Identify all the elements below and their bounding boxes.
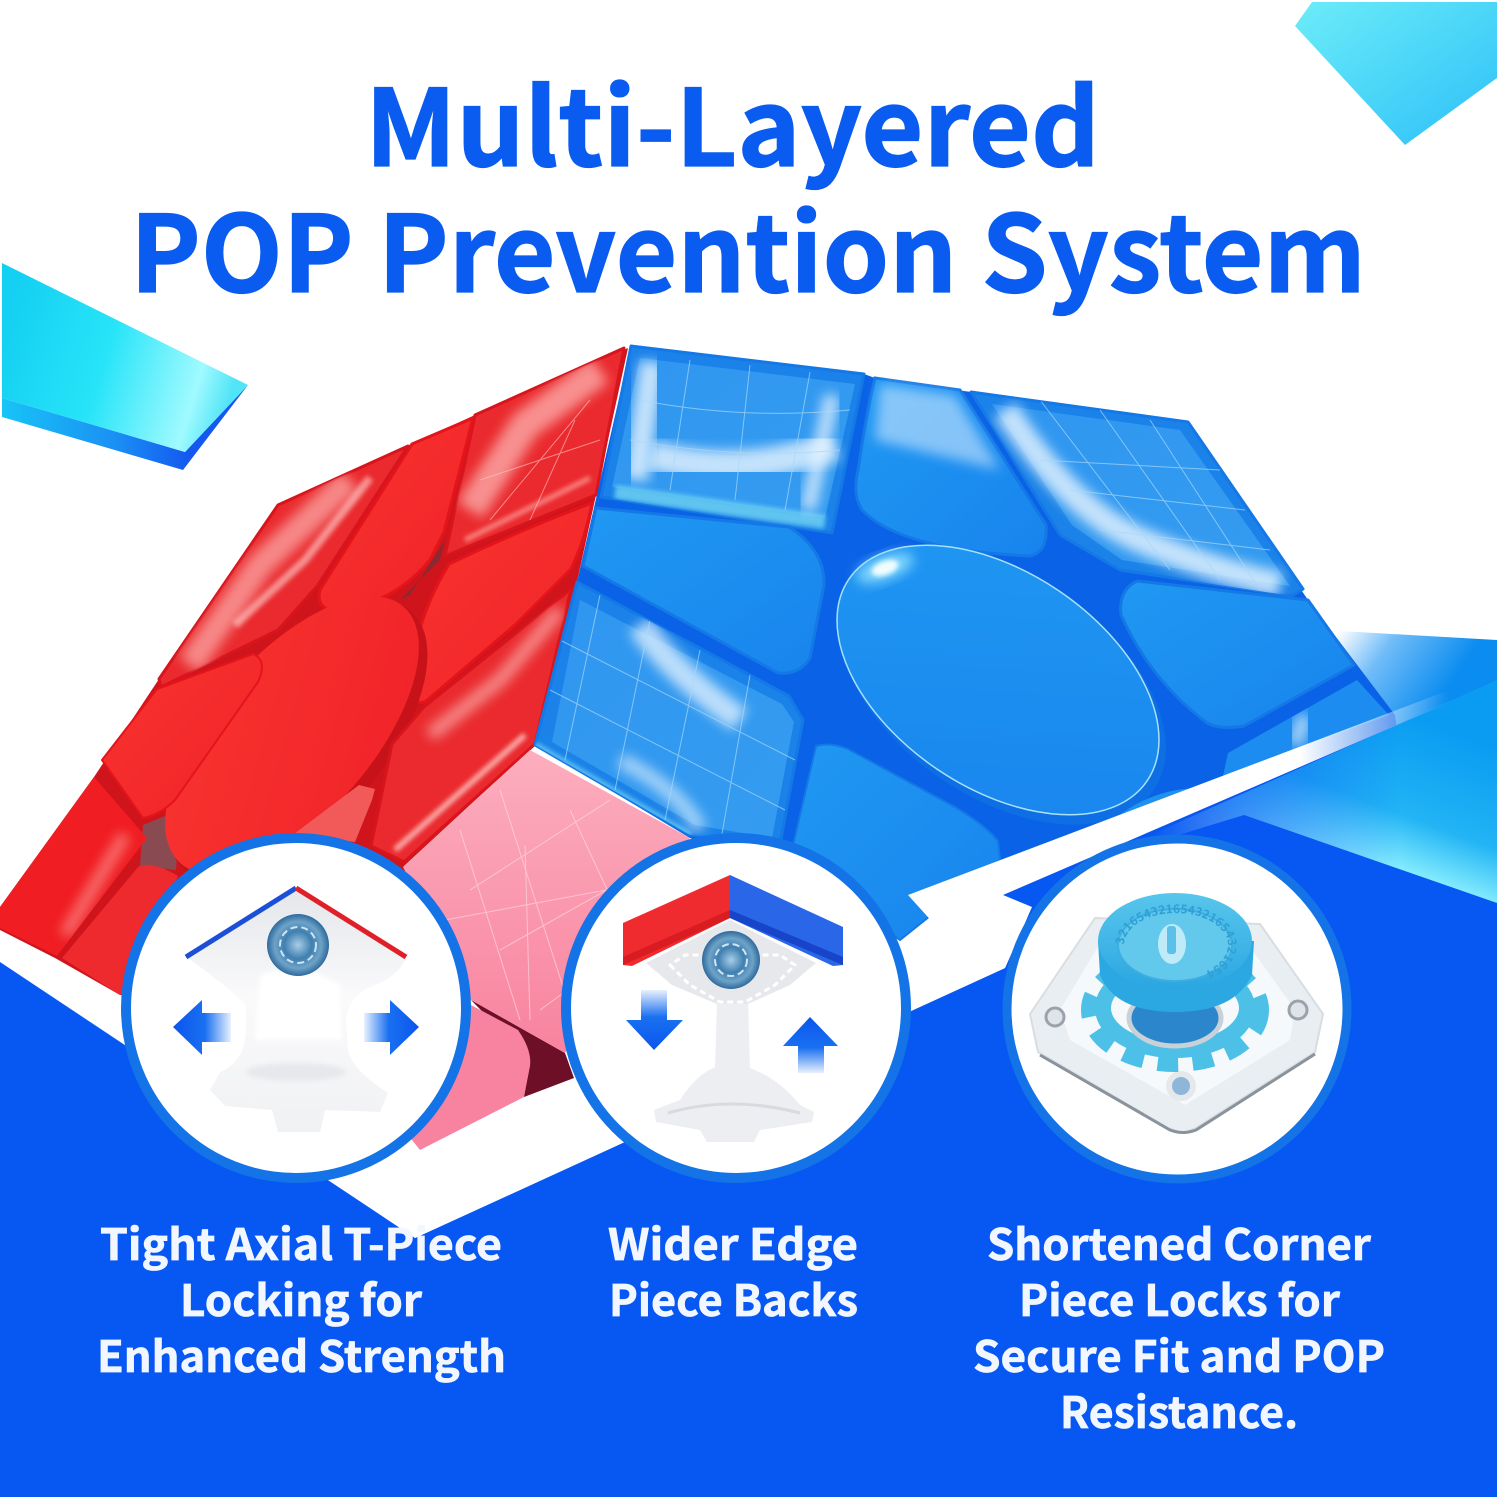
shape: left cyan prism [2, 263, 248, 470]
caption: T-piece: Enhanced Strength [97, 1323, 506, 1385]
sticker: red corner far [159, 446, 408, 687]
icon: corner plate [1029, 893, 1324, 1134]
caption: edge piece [608, 1211, 858, 1329]
title [130, 43, 1366, 323]
sticker: blue centre oval [788, 490, 1215, 881]
sticker: blue right edge [1121, 581, 1354, 727]
cube [0, 346, 1400, 1150]
shape: right cyan panel behind cube [1300, 631, 1497, 760]
arrow: up [783, 1017, 838, 1073]
caption: edge piece: Piece Backs [609, 1267, 858, 1329]
sticker: blue lower left corner [535, 582, 803, 845]
caption: T-piece: Locking for [180, 1267, 422, 1329]
circle 3: shortened corner piece locks [1002, 834, 1352, 1184]
sticker: blue lower right corner [1223, 680, 1389, 776]
circle 1: T-piece locking [126, 838, 466, 1178]
caption: corner piece: Shortened Corner [987, 1211, 1371, 1273]
sticker: blue top edge [856, 378, 1046, 556]
sticker: blue lower edge [790, 745, 1000, 940]
sticker: red corner lower [371, 589, 571, 862]
sticker: red edge upper [319, 418, 473, 610]
icon: edge piece [623, 875, 843, 1142]
blue background area [0, 680, 1500, 1500]
shadow gaps in red side [140, 540, 445, 870]
title: POP Prevention System [130, 169, 1366, 323]
sticker: red centre oval [120, 554, 474, 926]
caption: T-piece: Tight Axial T-Piece [100, 1211, 502, 1273]
knob cap: 321654321654321654321654 [1116, 904, 1236, 978]
sticker: red corner top [445, 348, 624, 556]
gear ring [1093, 960, 1257, 1060]
sticker: blue right corner [971, 392, 1303, 596]
cyan glow on right of blue area [1162, 680, 1497, 903]
sticker: red edge left [102, 654, 262, 818]
caption: corner piece: Piece Locks for [1019, 1267, 1340, 1329]
dark gap: behind pink [471, 1000, 574, 1097]
circle 2: wider edge piece backs [566, 838, 906, 1178]
caption: corner piece: Secure Fit and POP [973, 1323, 1385, 1385]
knob cap [1098, 893, 1254, 1012]
highlight: blue top edge [875, 384, 1000, 470]
cube body: blue side [535, 346, 1400, 930]
sticker: red edge by seam [411, 503, 592, 702]
sticker: blue lower glimpse [1116, 788, 1196, 830]
caption: corner piece: Resistance. [1060, 1379, 1298, 1441]
sticker: red lower left corner [0, 777, 147, 956]
white diagonal lightning band [346, 672, 1497, 1238]
icon: T-piece [186, 888, 406, 1132]
arrow: left [173, 1000, 231, 1055]
sticker: blue corner top [601, 346, 864, 533]
caption: T-piece [97, 1211, 506, 1385]
caption: corner piece [973, 1211, 1385, 1441]
cube body: red side [0, 348, 628, 1097]
shape: top-right cyan prism [1295, 2, 1497, 145]
sticker: pink corner [403, 750, 690, 1053]
sticker: red small centre glimpse [294, 785, 375, 842]
arrow: down [626, 990, 683, 1050]
sticker: blue left edge [583, 508, 824, 673]
sticker: pink lower [380, 1005, 530, 1150]
sticker: red lower left edge [62, 865, 178, 995]
caption: edge piece: Wider Edge [608, 1211, 858, 1273]
spindle [1129, 990, 1221, 1046]
arrow: right [364, 1000, 419, 1055]
title: Multi-Layered [365, 43, 1100, 197]
